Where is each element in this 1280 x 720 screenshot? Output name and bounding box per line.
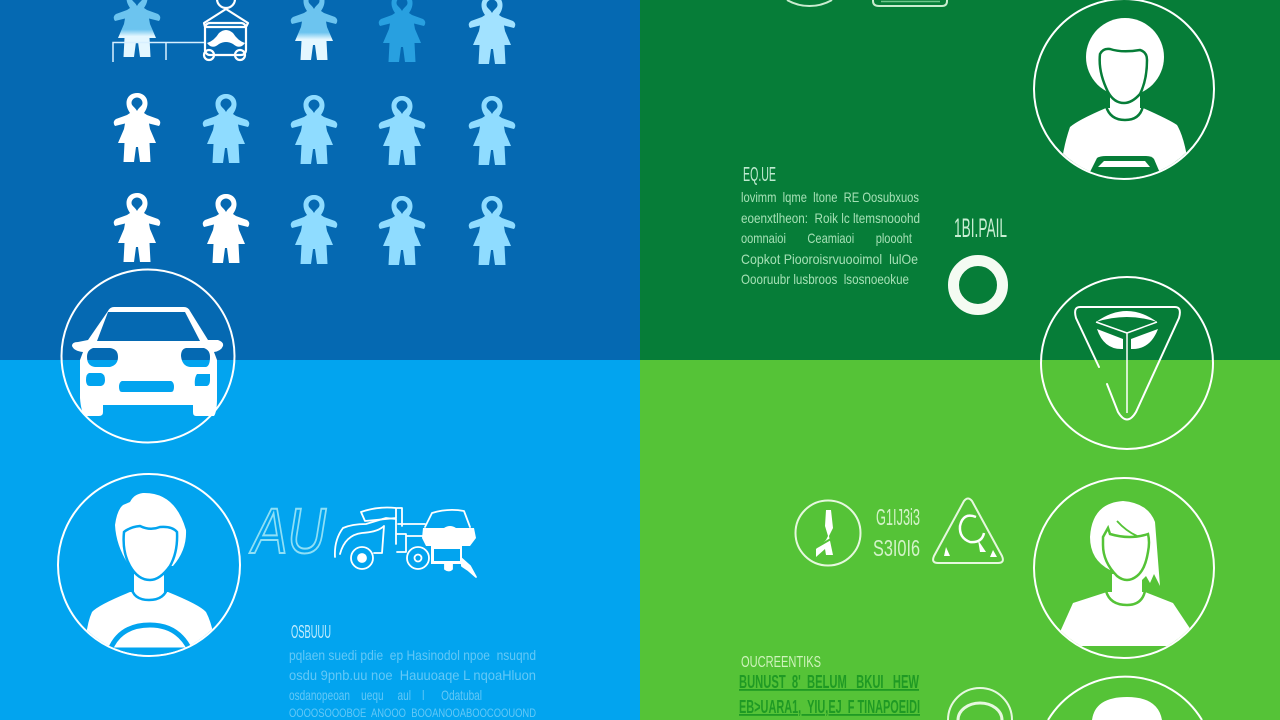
icon: stroller figure outline [204, 0, 248, 60]
text body lines, dark green underlined [739, 672, 920, 717]
panel: bottom-left bright blue [0, 360, 640, 720]
text heading: EQ.UE [743, 164, 776, 186]
text body lines [741, 189, 920, 287]
top partial icon: rounded box [873, 0, 947, 6]
text heading: OSBUUU [291, 622, 331, 642]
outlined heading letters: AU [249, 495, 327, 567]
text body lines: OOOOSOOOBOE ANOOO BOOANOOABOOCOOUOND [289, 706, 536, 720]
text body lines: lovimm lqme ltone RE Oosubxuos [741, 189, 919, 205]
panel: top-left dark blue [0, 0, 640, 360]
icon: car in circle [62, 270, 234, 442]
text block: bottom-left description [289, 622, 536, 720]
text body lines: oomnaioi Ceamiaoi ploooht [741, 230, 912, 246]
pictogram grid of figures [114, 0, 515, 265]
icon: triangle emblem in circle [1041, 277, 1213, 449]
text body lines: Copkot Piooroisrvuooimol lulOe [741, 251, 918, 267]
row 3 figures [114, 193, 515, 265]
text body lines, dark green underlined: EB>UARA1, YIU,EJ F TINAPOEIDI [739, 697, 920, 717]
text body lines: osdu 9pnb.uu noe Hauuoaqe L nqoaHluon [289, 667, 536, 683]
icon: driver in circle, bright blue panel [58, 474, 240, 660]
stat number: 1BI.PAIL [954, 213, 1007, 243]
donut ring stat [954, 260, 1002, 310]
icon: driver in circle, dark green panel [1034, 0, 1214, 180]
text block: bottom-right description [739, 654, 920, 717]
text body lines [289, 647, 536, 720]
small stat labels: S3I0I6 [873, 535, 920, 561]
icon: bench line [113, 42, 206, 62]
small circle icon, bottom [948, 688, 1012, 720]
top partial icon: circle [787, 0, 832, 6]
panel: bottom-right bright green [640, 360, 1280, 720]
text body lines: pqlaen suedi pdie ep Hasinodol npoe nsuqnd [289, 647, 536, 663]
panel: top-right dark green [640, 0, 1280, 360]
small stat labels: G1IJ3i3 [876, 504, 920, 530]
text heading: OUCREENTIKS [741, 654, 821, 671]
text body lines: osdanopeoan uequ aul l Odatubal [289, 687, 482, 703]
icon: partial person in circle [1048, 677, 1202, 720]
icon: vehicles line drawing [335, 508, 476, 577]
small circle icon [796, 500, 860, 566]
text body lines: eoenxtlheon: Roik lc ltemsnooohd [741, 210, 920, 226]
small stat labels [873, 504, 920, 561]
text block: top-right description [741, 164, 920, 287]
text body lines: Oooruubr lusbroos lsosnoeokue [741, 271, 909, 287]
triangle warning icon [933, 498, 1003, 563]
text body lines, dark green underlined: BUNUST 8' BELUM BKUI HEW [739, 672, 919, 692]
row 1 figures [114, 0, 515, 64]
icon: woman in circle [1034, 478, 1214, 658]
row 2 figures [114, 93, 515, 165]
